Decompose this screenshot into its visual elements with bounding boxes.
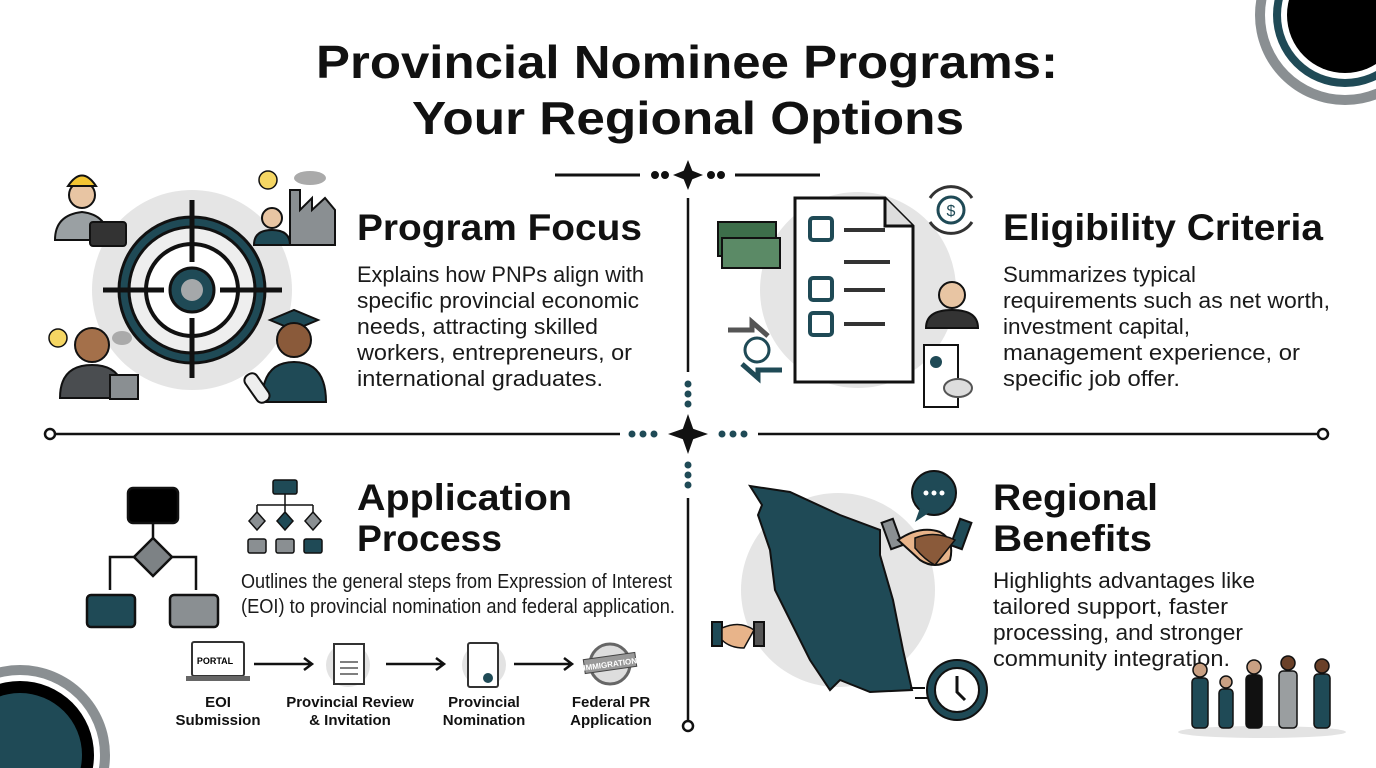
icon: target [92,190,292,390]
icon: worker [55,176,126,246]
title: Provincial Nominee Programs: [316,36,1058,88]
flow steps [175,642,652,729]
body text: (EOI) to provincial nomination and federal application. [241,596,675,618]
step: nomination [443,643,525,729]
panel: application process [87,477,675,729]
title [316,36,1058,144]
step: EOI: EOI [205,694,231,711]
step: review: & Invitation [309,712,391,729]
icon: community people [1178,656,1346,738]
step: EOI: PORTAL [197,656,234,666]
icon: person suit [926,282,978,328]
title: Your Regional Options [412,92,964,144]
step: federal [570,644,652,729]
step: EOI: Submission [175,712,261,729]
icon: clock [910,660,987,720]
body text: Explains how PNPs align with [357,262,644,287]
body text: requirements such as net worth, [1003,288,1330,313]
step: nomination: Nomination [443,712,525,729]
body text: specific job offer. [1003,366,1180,391]
step: review: Provincial Review [286,694,414,711]
body text: international graduates. [357,366,603,391]
panel: regional benefits [712,471,1346,738]
body text: tailored support, faster [993,594,1228,619]
step: nomination: Provincial [448,694,520,711]
arrow [386,658,444,670]
body text: processing, and stronger [993,620,1243,645]
body text: Outlines the general steps from Expression of Interest [241,571,672,593]
icon: money [718,222,780,268]
body text: investment capital, [1003,314,1190,339]
heading: Regional [993,477,1158,518]
body text [241,571,675,618]
icon: businessman [49,328,138,399]
heading: Eligibility Criteria [1003,207,1323,248]
step: federal: Federal PR [572,694,650,711]
body text: management experience, or [1003,340,1300,365]
body text: Summarizes typical [1003,262,1196,287]
icon: map of region [741,486,935,692]
step: federal: IMMIGRATION [583,656,638,673]
body text: community integration. [993,646,1230,671]
step: federal: Application [570,712,652,729]
icon: flowchart large [87,488,218,627]
panel: program focus [49,171,644,405]
heading [993,477,1158,559]
body text: needs, attracting skilled [357,314,598,339]
body text: specific provincial economic [357,288,639,313]
dividers [45,198,1328,731]
panel: eligibility criteria [718,187,1330,407]
heading: Application [357,477,572,518]
center ornament [628,380,748,488]
step: EOI [175,642,261,729]
corner decoration bottom-left [0,665,110,768]
icon: document stamp [924,345,972,407]
heading: Benefits [993,518,1152,559]
body text: Highlights advantages like [993,568,1255,593]
heading: Program Focus [357,207,642,248]
icon: dollar cycle [930,187,972,233]
icon: small handshake [712,622,764,648]
body text: workers, entrepreneurs, or [356,340,632,365]
icon: factory person [254,171,335,245]
corner decoration top-right [1255,0,1376,105]
icon: speech bubble [912,471,956,522]
arrow [254,658,312,670]
icon: handshake [882,519,971,565]
icon: graduate [242,310,326,405]
icon: checklist [760,192,956,388]
body text [356,262,644,391]
icon: exchange dollar [728,322,782,378]
heading: Process [357,518,502,559]
title ornament [555,160,820,190]
heading [357,477,572,559]
body text [993,568,1255,671]
step: review [286,643,414,729]
body text [1003,262,1330,391]
icon: dollar cycle: $ [947,203,956,220]
icon: flowchart small [248,480,322,553]
arrow [514,658,572,670]
